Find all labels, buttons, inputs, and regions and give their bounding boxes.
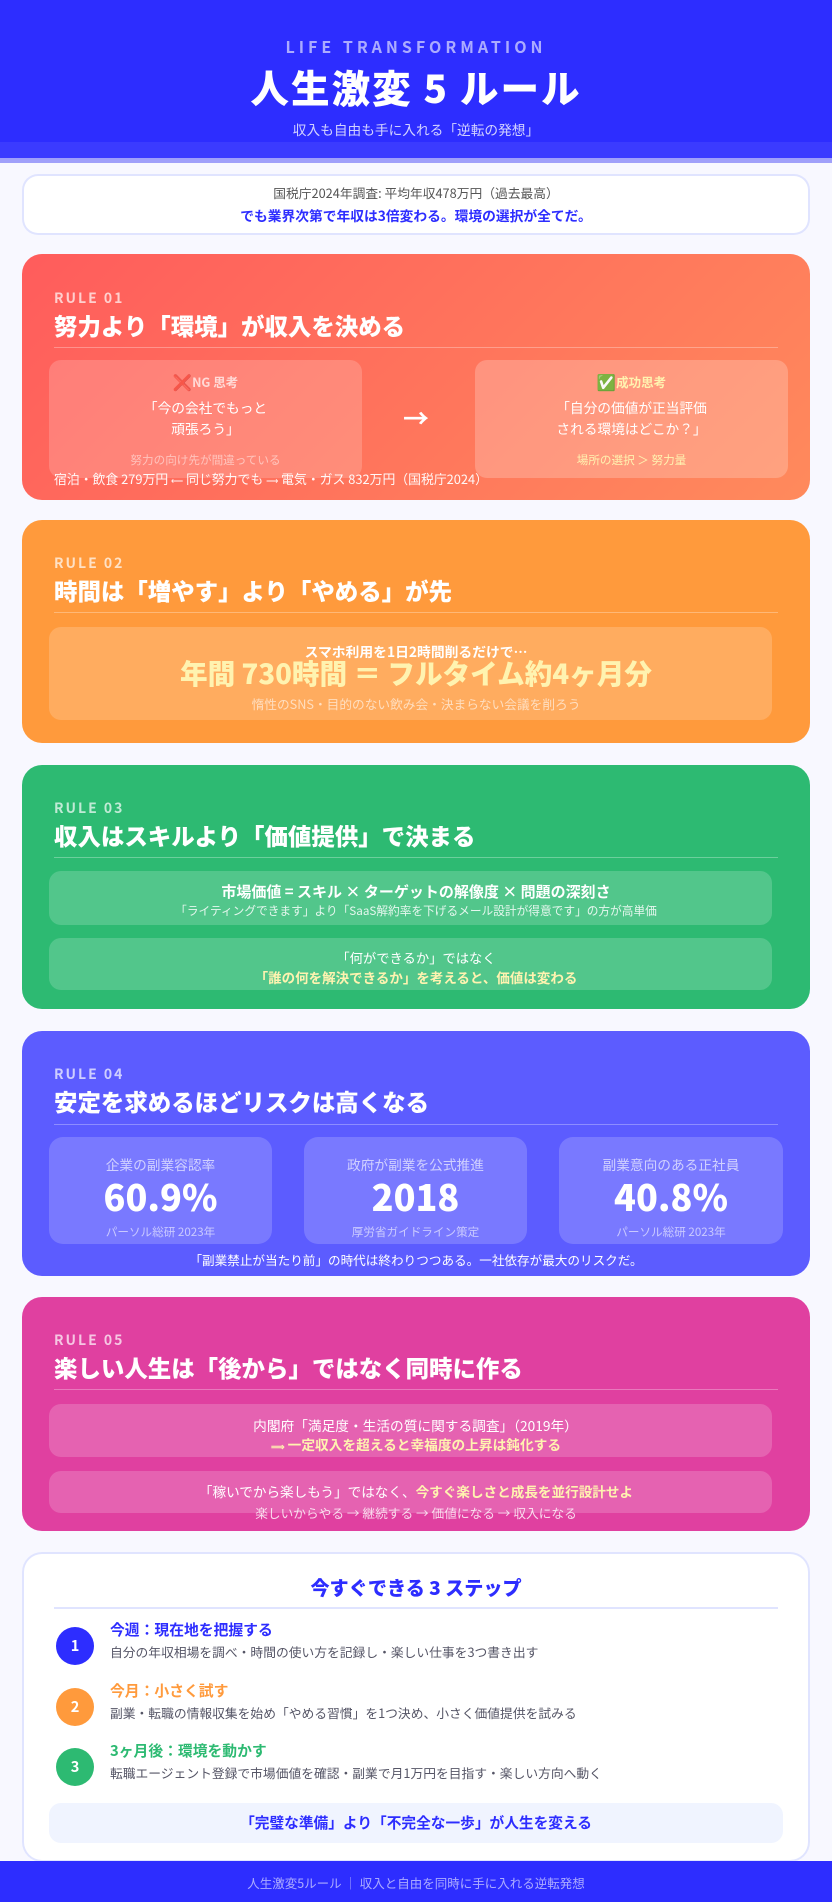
formula example: 「ライティングできます」より「SaaS解約率を下げるメール設計が得意です」の方が高単価 — [175, 902, 657, 919]
survey finding: ⟹ 一定収入を超えると幸福度の上昇は鈍化する — [271, 1434, 561, 1454]
arrow: → — [403, 399, 429, 436]
success note: 場所の選択 ＞ 努力量 — [577, 452, 686, 468]
panel: rule 01 — [22, 254, 810, 500]
parallel design box — [49, 1471, 772, 1513]
cycle note: 楽しいからやる → 継続する → 価値になる → 収入になる — [255, 1503, 577, 1522]
success quote: 「自分の価値が正当評価 — [556, 397, 707, 417]
panel: rule 02 — [22, 520, 810, 743]
success quote — [556, 397, 707, 438]
rule heading: 収入はスキルより「価値提供」で決まる — [54, 818, 475, 852]
footer — [0, 1861, 832, 1902]
reframe box — [49, 938, 772, 990]
formula box — [49, 871, 772, 925]
stat label: 副業意向のある正社員 — [603, 1154, 739, 1174]
note: 惰性のSNS・目的のない飲み会・決まらない会議を削ろう — [252, 694, 580, 713]
message: 「稼いでから楽しもう」ではなく、今すぐ楽しさと成長を並行設計せよ — [199, 1481, 633, 1501]
takeaway: 「副業禁止が当たり前」の時代は終わりつつある。一社依存が最大のリスクだ。 — [189, 1250, 643, 1269]
stat source: パーソル総研 2023年 — [106, 1224, 215, 1240]
stat source: 厚労省ガイドライン策定 — [352, 1224, 479, 1240]
step 3 number — [56, 1748, 94, 1786]
lead text: スマホ利用を1日2時間削るだけで… — [305, 641, 527, 661]
survey box — [49, 1404, 772, 1457]
income comparison: 宿泊・飲食 279万円 ⟵ 同じ努力でも ⟶ 電気・ガス 832万円（国税庁2024） — [54, 469, 488, 488]
rule heading: 安定を求めるほどリスクは高くなる — [54, 1084, 429, 1118]
NG quote — [144, 397, 267, 438]
stat: government promotion — [304, 1137, 527, 1244]
callout — [49, 1803, 783, 1843]
success quote: される環境はどこか？」 — [556, 418, 707, 438]
step 1 description: 自分の年収相場を調べ・時間の使い方を記録し・楽しい仕事を3つ書き出す — [110, 1642, 538, 1661]
panel: rule 03 — [22, 765, 810, 1009]
title: 人生激変 5 ルール — [250, 59, 582, 115]
rule heading: 努力より「環境」が収入を決める — [54, 308, 405, 342]
steps heading: 今すぐできる 3 ステップ — [310, 1573, 522, 1601]
survey source: 内閣府「満足度・生活の質に関する調査」（2019年） — [253, 1415, 578, 1435]
NG note: 努力の向け先が間違っている — [130, 452, 281, 468]
step 3 number: 3 — [71, 1756, 79, 1777]
step 1 number: 1 — [71, 1635, 79, 1656]
rule heading: 時間は「増やす」より「やめる」が先 — [54, 573, 452, 607]
NG label: ❌NG 思考 — [173, 371, 238, 393]
step 2 title: 今月：小さく試す — [110, 1680, 228, 1701]
intro message: でも業界次第で年収は3倍変わる。環境の選択が全てだ。 — [240, 205, 592, 225]
step 2 number — [56, 1688, 94, 1726]
stat value: 2018 — [372, 1170, 459, 1222]
reframe emphasis: 「誰の何を解決できるか」を考えると、価値は変わる — [255, 967, 577, 987]
step 2 description: 副業・転職の情報収集を始め「やめる習慣」を1つ決め、小さく価値提供を試みる — [110, 1703, 577, 1722]
formula: 市場価値 = スキル × ターゲットの解像度 × 問題の深刻さ — [221, 881, 611, 902]
eyebrow: LIFE TRANSFORMATION — [285, 34, 547, 58]
rule label: RULE 02 — [54, 553, 124, 573]
NG quote: 頑張ろう」 — [171, 418, 240, 438]
stat label: 政府が副業を公式推進 — [347, 1154, 484, 1174]
success thinking box — [475, 360, 788, 478]
intro panel — [22, 174, 810, 235]
step 1 number — [56, 1627, 94, 1665]
panel: rule 04 — [22, 1031, 810, 1276]
step 3 description: 転職エージェント登録で市場価値を確認・副業で月1万円を目指す・楽しい方向へ動く — [110, 1763, 602, 1782]
footer text: 人生激変5ルール │ 収入と自由を同時に手に入れる逆転発想 — [247, 1873, 585, 1892]
big number: 年間 730時間 ＝ フルタイム約4ヶ月分 — [180, 652, 652, 692]
stat: side job intent — [559, 1137, 783, 1244]
stat value: 40.8% — [614, 1170, 728, 1222]
stat: approval rate — [49, 1137, 272, 1244]
reframe line: 「何ができるか」ではなく — [336, 948, 496, 967]
step 2 number: 2 — [71, 1696, 79, 1717]
callout text: 「完璧な準備」より「不完全な一歩」が人生を変える — [240, 1812, 592, 1833]
stat value: 60.9% — [104, 1170, 217, 1222]
rule label: RULE 05 — [54, 1330, 124, 1350]
rule label: RULE 01 — [54, 288, 124, 308]
rule label: RULE 03 — [54, 798, 124, 818]
intro statistic: 国税庁2024年調査: 平均年収478万円（過去最高） — [273, 183, 559, 202]
NG thinking box — [49, 360, 362, 478]
step 3 title: 3ヶ月後：環境を動かす — [110, 1740, 267, 1761]
panel: rule 05 — [22, 1297, 810, 1531]
success label: ✅成功思考 — [597, 371, 666, 393]
step 1 title: 今週：現在地を把握する — [110, 1619, 273, 1640]
rule heading: 楽しい人生は「後から」ではなく同時に作る — [54, 1350, 523, 1384]
stat label: 企業の副業容認率 — [106, 1154, 215, 1174]
NG quote: 「今の会社でもっと — [144, 397, 267, 417]
subtitle: 収入も自由も手に入れる「逆転の発想」 — [293, 119, 539, 139]
panel: three steps — [22, 1552, 810, 1862]
time savings box — [49, 627, 772, 720]
stat source: パーソル総研 2023年 — [616, 1224, 726, 1240]
header — [0, 0, 832, 163]
rule label: RULE 04 — [54, 1064, 124, 1084]
